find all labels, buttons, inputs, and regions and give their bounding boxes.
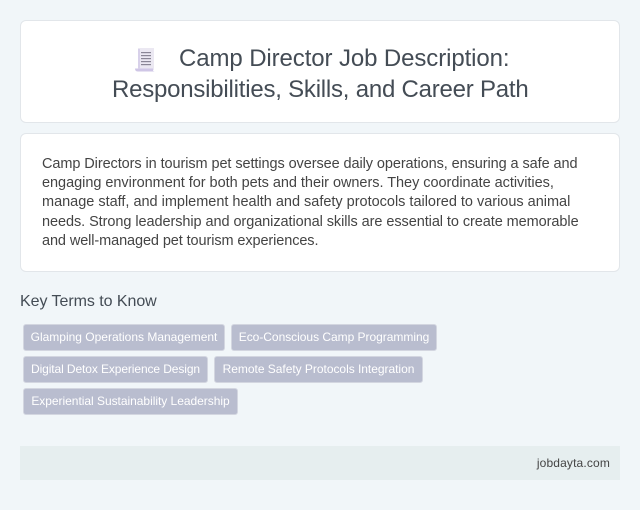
icon: document scroll	[135, 48, 154, 72]
description text: needs. Strong leadership and organizational skills are essential to create memorable	[42, 214, 579, 230]
title card	[20, 20, 620, 123]
title text	[112, 45, 529, 103]
description text: Camp Directors in tourism pet settings oversee daily operations, ensuring a safe and	[42, 156, 577, 172]
tag	[23, 356, 208, 383]
tag: Glamping Operations Management	[31, 330, 217, 344]
description text	[42, 156, 579, 249]
tag	[23, 388, 238, 415]
description card	[20, 133, 620, 272]
heading: key terms: Key Terms to Know	[20, 293, 157, 310]
tag: Remote Safety Protocols Integration	[223, 362, 414, 376]
footer bar	[20, 446, 620, 480]
title text: Camp Director Job Description:	[179, 45, 509, 72]
tag: Experiential Sustainability Leadership	[31, 394, 230, 408]
tag	[231, 324, 437, 351]
tag: Eco-Conscious Camp Programming	[239, 330, 429, 344]
tag: Digital Detox Experience Design	[31, 362, 200, 376]
description text: and well-managed pet tourism experiences.	[42, 233, 318, 249]
description text: engaging environment for both pets and their owners. They coordinate activities,	[42, 175, 554, 191]
tag	[214, 356, 423, 383]
description text: manage staff, and implement health and safety protocols tailored to various animal	[42, 194, 570, 210]
title text: Responsibilities, Skills, and Career Path	[112, 76, 529, 103]
tag list	[23, 324, 437, 415]
footer brand: jobdayta.com	[537, 456, 610, 470]
tag	[23, 324, 225, 351]
